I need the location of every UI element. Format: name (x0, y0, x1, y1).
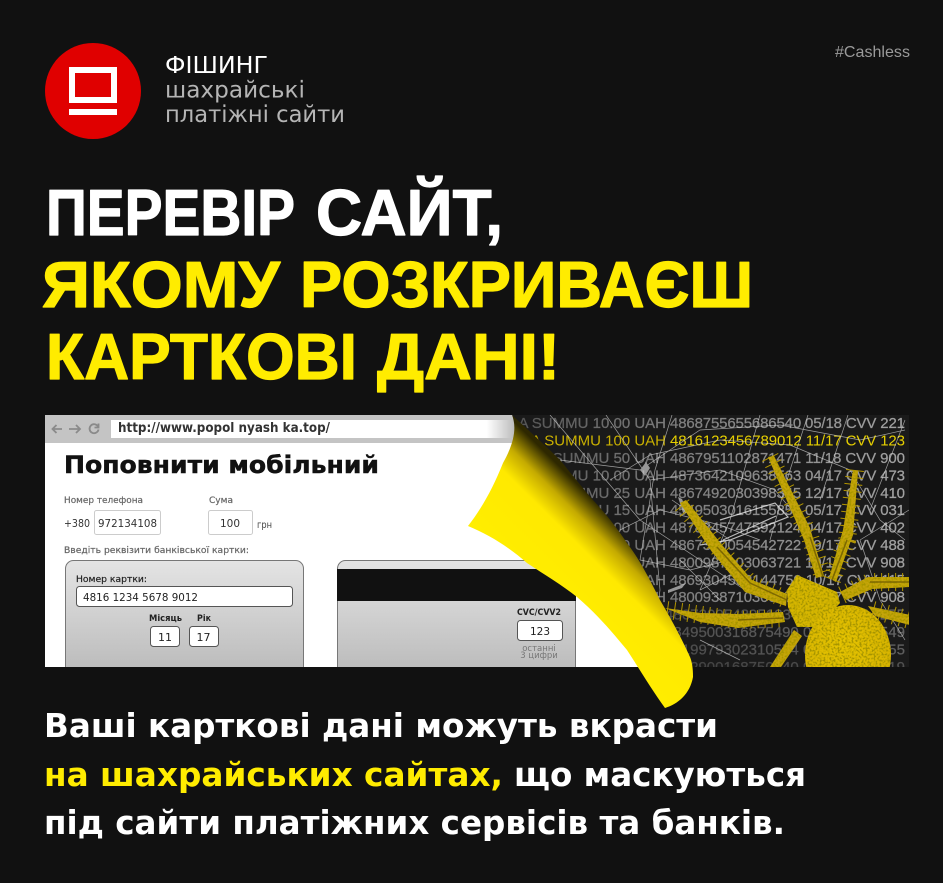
body text: Ваші карткові дані можуть вкрасти (44, 707, 718, 745)
panel: dark data background: 4867300054542722 09/17 CVV 488 (670, 537, 905, 554)
browser toolbar: http://www.popol nyash ka.top/ (118, 421, 330, 436)
form heading: Поповнити мобільний (64, 451, 379, 479)
panel: dark data background: 4816123456789012 11/17 CVV 123 (670, 433, 905, 450)
phone and amount fields: грн (257, 520, 272, 531)
browser toolbar (45, 415, 530, 443)
panel: dark data background: A SUMMU 25 UAH (539, 485, 666, 502)
panel: dark data background: 4867951102871471 11/18 CVV 900 (670, 450, 905, 467)
panel: dark data background (500, 415, 909, 676)
main heading: РОЗКРИВАЄШ (300, 248, 753, 321)
main heading: ДАНІ! (377, 320, 560, 393)
panel: fake payment web page (45, 415, 638, 667)
icon: red circle with computer (45, 43, 141, 139)
panel: dark data background: 4802900168750140 08/18 CVV 719 (665, 659, 905, 676)
card front: Рік (197, 613, 211, 624)
panel: dark data background: 4800938710306372 10/17 CVV 908 (670, 589, 905, 606)
panel: dark data background: A SUMMU 10.00 UAH (518, 415, 666, 432)
illustration: phishing page peeled over hacker data (45, 415, 909, 667)
card front: Місяць (149, 613, 182, 624)
phone and amount fields (64, 496, 272, 556)
main heading: ПЕРЕВІР (46, 176, 295, 249)
panel: dark data background: 4878345747592124 04/17 CVV 402 (670, 520, 905, 537)
phone and amount fields: 100 (220, 518, 240, 530)
header topic text (165, 53, 345, 128)
header topic text: ФІШИНГ (165, 53, 268, 79)
panel: dark data background: 4549503016155855 05/17 CVV 031 (670, 502, 905, 519)
panel: dark data background: A SUMMU 100 UAH (531, 520, 666, 537)
panel: dark data background: 4819979302310574 08/18 CVV 655 (665, 641, 905, 658)
spider abdomen (805, 605, 891, 667)
panel: dark data background: 4869304582144750 10/17 CVV 115 (670, 572, 905, 589)
card back (337, 560, 576, 667)
panel: dark data background: 4867492030398345 12/17 CVV 410 (670, 485, 905, 502)
panel: dark data background: A SUMMU 15 UAH (539, 502, 666, 519)
panel: dark data background: 4868755655686540 05/18 CVV 221 (670, 415, 905, 432)
card front (65, 560, 304, 667)
phone and amount fields: Введіть реквізити банківської картки: (64, 546, 249, 556)
main heading: ЯКОМУ (42, 248, 282, 321)
card back: останні (522, 644, 556, 654)
spider web (550, 415, 909, 667)
spider leg shading (717, 537, 910, 620)
card front: 11 (158, 631, 172, 644)
main heading: САЙТ, (316, 176, 503, 249)
phone and amount fields: Сума (209, 496, 233, 506)
body text: що маскуються (514, 756, 806, 794)
panel: dark data background: 4867200548951234 11/17 CVV 255 (665, 607, 905, 624)
panel: dark data background: A SUMMU 200 UAH (531, 537, 666, 554)
card front: 4816 1234 5678 9012 (83, 591, 198, 604)
spider (665, 453, 909, 667)
card front: Номер картки: (76, 575, 147, 585)
panel: dark data background: A SUMMU 100 UAH (531, 433, 666, 450)
card front: 17 (196, 631, 210, 644)
spider legs (665, 456, 910, 667)
main heading: КАРТКОВІ (46, 320, 357, 393)
panel: dark data background: 4849500316875490 07/17 CVV 549 (665, 624, 905, 641)
main heading (42, 176, 753, 393)
panel: dark data background: A SUMMU 50 UAH (539, 554, 666, 571)
panel: dark data background: 4873642109638563 04/17 CVV 473 (670, 467, 905, 484)
phone and amount fields: +380 (64, 518, 90, 530)
phone and amount fields: Номер телефона (64, 496, 143, 506)
phone and amount fields: 972134108 (98, 518, 157, 530)
body text: під сайти платіжних сервісів та банків. (44, 804, 785, 842)
header topic text: шахрайські (165, 78, 305, 104)
header topic text: платіжні сайти (165, 102, 345, 128)
spider cephalothorax (787, 575, 840, 627)
card back: 3 цифри (520, 651, 558, 661)
panel: dark data background: 4800987103063721 10/17 CVV 908 (670, 554, 905, 571)
card back: 123 (530, 626, 550, 638)
hashtag: #Cashless (835, 44, 910, 61)
panel: dark data background: A SUMMU 10.00 UAH (518, 572, 666, 589)
panel: dark data background: A SUMMU 50 UAH (539, 450, 666, 467)
peeled page corner (468, 415, 693, 708)
panel: dark data background: A SUMMU 10 UAH (539, 589, 666, 606)
card back: CVC/CVV2 (517, 608, 561, 618)
body text: на шахрайських сайтах, (44, 756, 503, 794)
spider leg hairs (667, 457, 910, 620)
panel: dark data background: A SUMMU 10.00 UAH (518, 467, 666, 484)
body text (44, 707, 806, 842)
